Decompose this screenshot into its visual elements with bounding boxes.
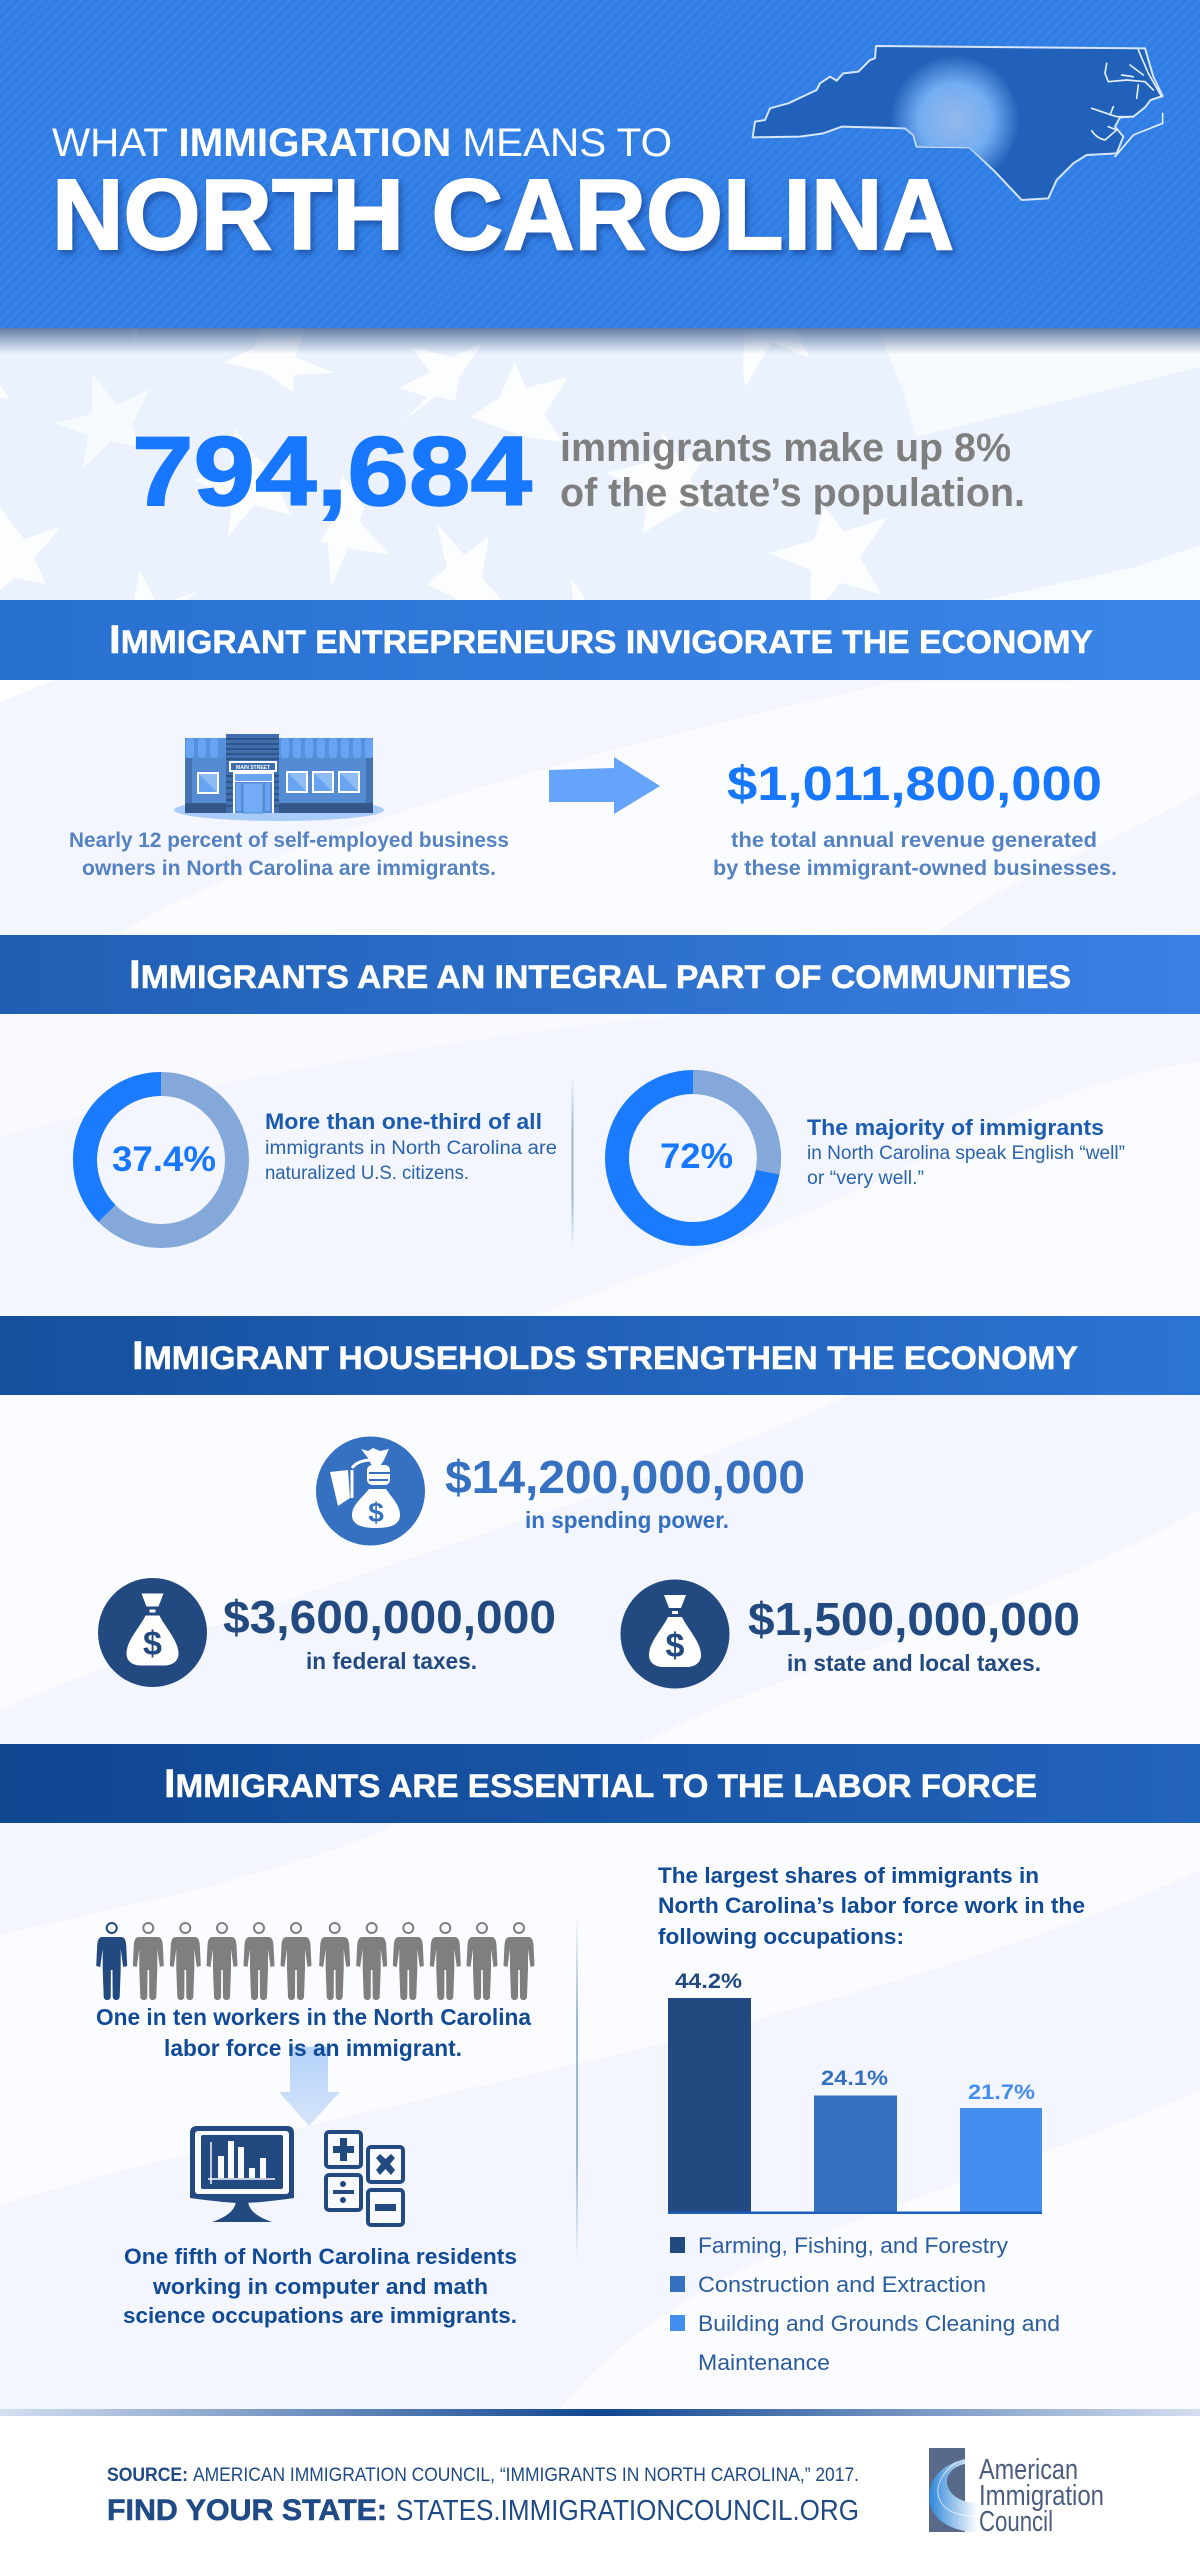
panel background: households [0, 1395, 1200, 1744]
section heading: communities: IMMIGRANTS ARE AN INTEGRAL PART OF COMMUNITIES [129, 953, 1071, 997]
hero panel: population [0, 328, 1200, 601]
text: self-employed owners: owners in North Carolina are immigrants. [82, 857, 496, 880]
icon: storefront: MAIN STREET [236, 765, 270, 771]
icon: money bag federal [98, 1578, 207, 1687]
section heading: communities [0, 935, 1200, 1014]
text: naturalized citizens: More than one-third of all [265, 1109, 542, 1134]
donut chart: 72% speak English [617, 1082, 769, 1234]
stat: state and local taxes: $1,500,000,000 [748, 1593, 1080, 1645]
stat: annual revenue [713, 758, 1117, 880]
donut chart: 72% speak English: 72% [660, 1137, 733, 1176]
logo: American Immigration Council: American [979, 2454, 1078, 2486]
section heading: entrepreneurs [0, 600, 1200, 680]
text: English speakers [807, 1115, 1125, 1189]
text: English speakers: in North Carolina speak English “well” [807, 1143, 1125, 1164]
population caption: immigrants make up 8% [560, 426, 1011, 470]
text: English speakers: or “very well.” [807, 1168, 924, 1189]
section heading: entrepreneurs: IMMIGRANT ENTREPRENEURS INVIGORATE THE ECONOMY [109, 618, 1093, 662]
population caption [560, 426, 1025, 515]
section heading: labor force: IMMIGRANTS ARE ESSENTIAL TO THE LABOR FORCE [164, 1762, 1037, 1806]
text: naturalized citizens [265, 1109, 557, 1184]
stat: annual revenue: by these immigrant-owned businesses. [713, 857, 1117, 880]
panel background: labor force [0, 1823, 1200, 2409]
icon: money bag state and local [620, 1580, 730, 1688]
stat: annual revenue: $1,011,800,000 [727, 758, 1102, 811]
bar chart: occupations: 21.7% [968, 2081, 1035, 2104]
bar chart: occupations [668, 1970, 1042, 2214]
stat: federal taxes [223, 1591, 556, 1674]
map of North Carolina [753, 46, 1163, 200]
panel background: entrepreneurs [0, 680, 1200, 935]
find your state line: STATES.IMMIGRATIONCOUNCIL.ORG [396, 2495, 859, 2527]
legend: Farming, Fishing, and Forestry [698, 2233, 1008, 2258]
icon: money bag state and local: $ [666, 1627, 685, 1665]
stat: spending power: in spending power. [525, 1507, 729, 1533]
find your state line [107, 2494, 859, 2527]
text: computer and math occupations [123, 2244, 517, 2328]
text: naturalized citizens: naturalized U.S. citizens. [265, 1163, 469, 1184]
icon: computer monitor with chart [190, 2126, 294, 2222]
header banner [0, 0, 1200, 328]
text: computer and math occupations: science occupations are immigrants. [123, 2303, 517, 2328]
text: occupations intro [658, 1863, 1085, 1949]
text: occupations intro: The largest shares of immigrants in [658, 1863, 1039, 1888]
arrow: right [549, 757, 660, 814]
icon: money bag federal: $ [143, 1625, 162, 1663]
icon: hand holding money bag [316, 1436, 425, 1546]
bar chart: occupations: 44.2% [675, 1970, 742, 1993]
text: computer and math occupations: One fifth of North Carolina residents [124, 2244, 517, 2269]
logo: American Immigration Council: Council [979, 2506, 1053, 2538]
section heading: labor force [0, 1744, 1200, 1823]
text: one in ten workers [96, 2004, 531, 2061]
legend [670, 2233, 1060, 2375]
source line: AMERICAN IMMIGRATION COUNCIL, “IMMIGRANTS IN NORTH CAROLINA,” 2017. [193, 2465, 859, 2486]
legend: Maintenance [698, 2350, 830, 2375]
stat: state and local taxes [748, 1593, 1080, 1676]
stat: federal taxes: $3,600,000,000 [223, 1591, 556, 1643]
text: occupations intro: North Carolina’s labor force work in the [658, 1893, 1085, 1918]
stat: spending power: $14,200,000,000 [445, 1451, 805, 1503]
text: naturalized citizens: immigrants in North Carolina are [265, 1138, 557, 1159]
panel background: communities [0, 1014, 1200, 1316]
legend: Construction and Extraction [698, 2272, 986, 2297]
pictogram: one in ten workers [96, 1923, 534, 2000]
text: occupations intro: following occupations: [658, 1924, 904, 1949]
text: computer and math occupations: working in computer and math [152, 2274, 488, 2299]
arrow: down [279, 2047, 340, 2126]
footer panel [0, 2409, 1200, 2566]
title line one: WHAT IMMIGRATION MEANS TO [52, 121, 672, 165]
legend: Building and Grounds Cleaning and [698, 2311, 1060, 2336]
stat: spending power [445, 1451, 805, 1533]
text: one in ten workers: One in ten workers in the North Carolina [96, 2004, 531, 2030]
text: self-employed owners [69, 829, 509, 880]
section heading: households: IMMIGRANT HOUSEHOLDS STRENGTHEN THE ECONOMY [132, 1334, 1078, 1378]
section heading: households [0, 1316, 1200, 1395]
find your state line: FIND YOUR STATE: [107, 2494, 387, 2527]
stat: state and local taxes: in state and local taxes. [787, 1650, 1041, 1676]
text: self-employed owners: Nearly 12 percent of self-employed business [69, 829, 509, 852]
donut chart: 37.4% naturalized citizens: 37.4% [112, 1140, 216, 1179]
bar chart: occupations: 24.1% [821, 2067, 888, 2090]
icon: hand holding money bag: $ [368, 1497, 384, 1528]
text: English speakers: The majority of immigrants [807, 1115, 1104, 1140]
donut chart: 37.4% naturalized citizens [85, 1084, 237, 1236]
logo: American Immigration Council [929, 2448, 1104, 2538]
stat: annual revenue: the total annual revenue generated [731, 829, 1097, 852]
icon: math symbols [326, 2132, 403, 2225]
text: one in ten workers: labor force is an immigrant. [164, 2035, 462, 2061]
logo: American Immigration Council: Immigration [979, 2480, 1104, 2512]
big number: 794,684 [132, 416, 532, 526]
stat: federal taxes: in federal taxes. [306, 1648, 477, 1674]
icon: storefront [174, 734, 384, 821]
title line two: NORTH CAROLINA [52, 159, 954, 271]
source line: SOURCE: [107, 2465, 188, 2486]
population caption: of the state’s population. [560, 471, 1025, 515]
